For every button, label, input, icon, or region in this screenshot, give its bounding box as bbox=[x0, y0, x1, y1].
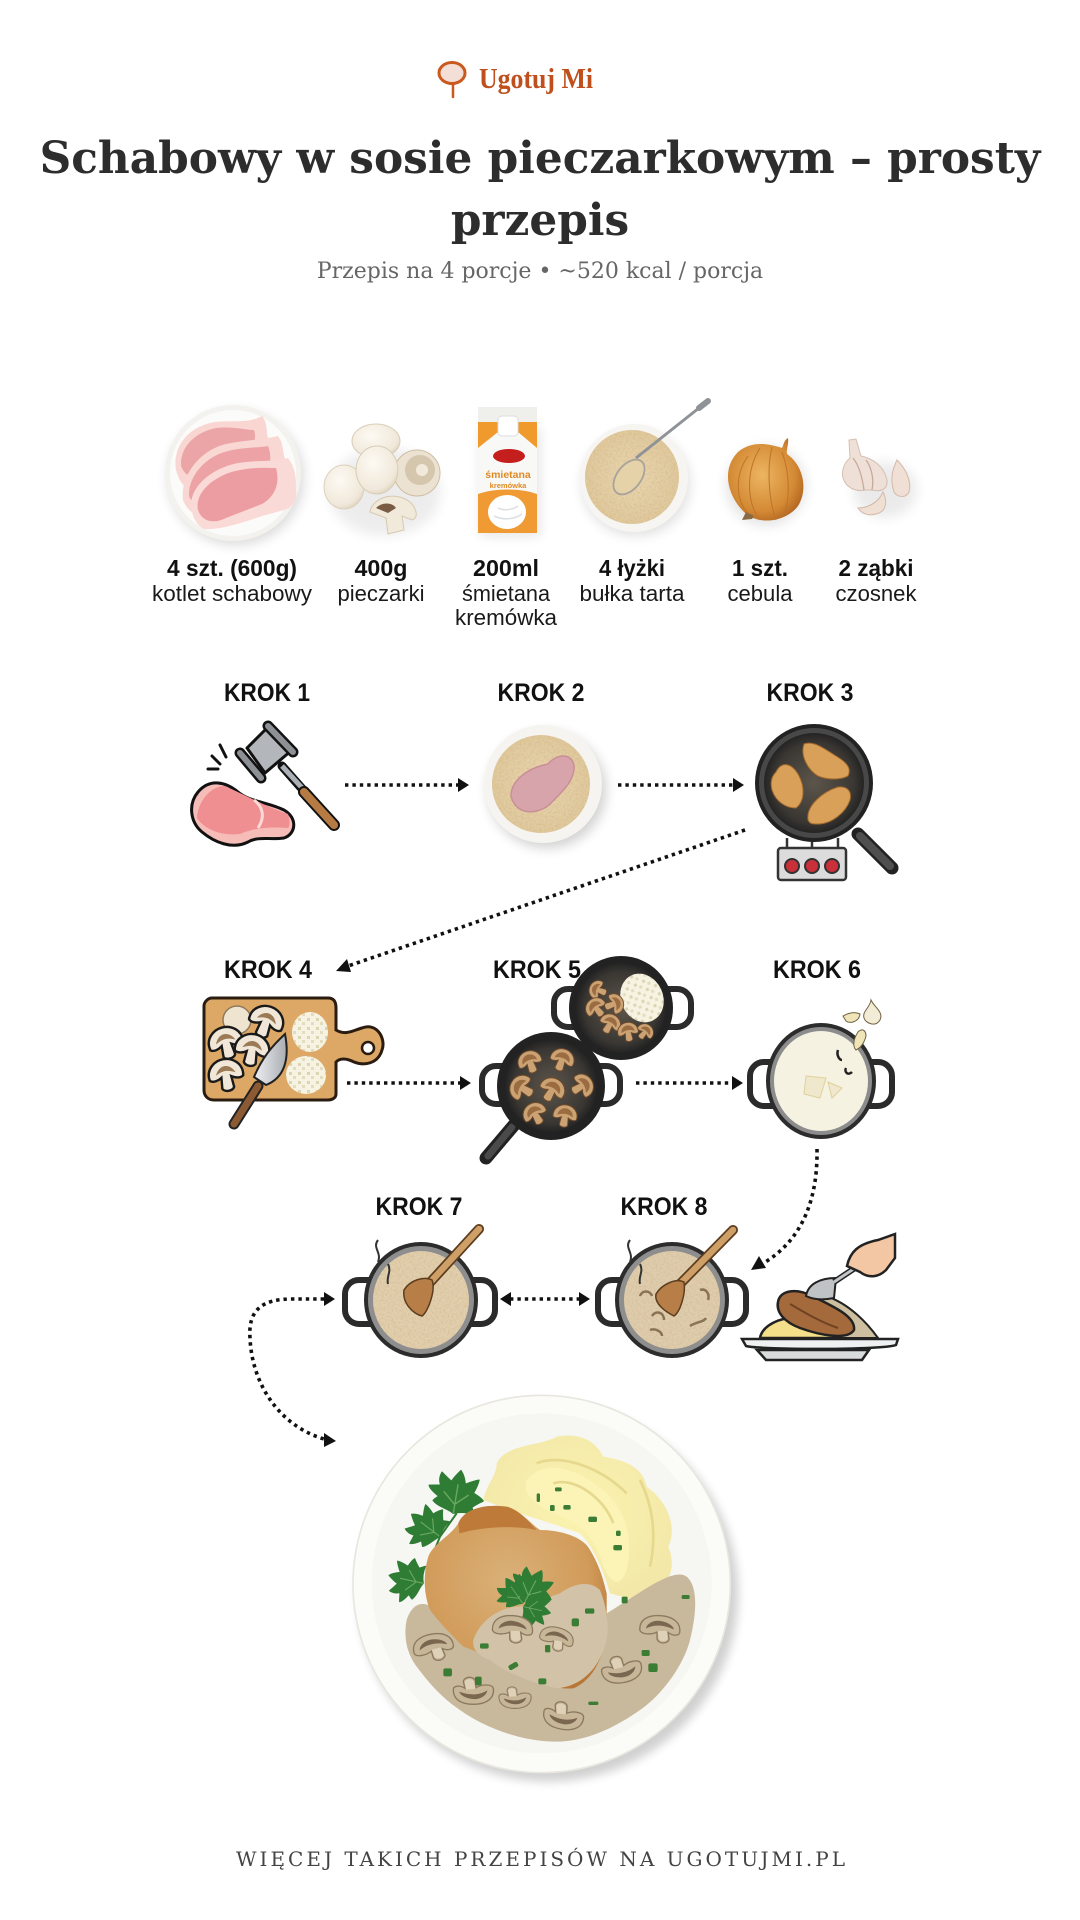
ingredient: garlic bbox=[842, 439, 917, 518]
parsley sprig bbox=[383, 1465, 488, 1606]
icon: step 5 pans bbox=[482, 956, 691, 1158]
footer: WIĘCEJ TAKICH PRZEPISÓW NA UGOTUJMI.PL bbox=[236, 1846, 845, 1871]
icon: step 8 pot with mushrooms and spoon bbox=[598, 1230, 746, 1358]
ingredient: cream carton bbox=[478, 407, 540, 536]
ingredient label: garlic: 2 ząbki bbox=[838, 555, 914, 581]
arrow: step 3 to 4 bbox=[336, 830, 745, 972]
arrow: step 1 to 2 bbox=[345, 778, 469, 792]
final dish plate bbox=[353, 1395, 738, 1782]
mushroom slices bbox=[411, 1614, 681, 1733]
step 5 heading: KROK 5 bbox=[493, 956, 581, 984]
ingredient label: onion: cebula bbox=[728, 581, 793, 606]
logo bbox=[439, 62, 593, 97]
sauce on cutlet bbox=[473, 1584, 608, 1688]
icon: step 4 cutting board bbox=[204, 998, 383, 1124]
ingredient label: pork: 4 szt. (600g) bbox=[167, 555, 297, 581]
ingredient label: breadcrumbs bbox=[580, 555, 685, 606]
arrow: step 7 to 8 double bbox=[500, 1292, 590, 1306]
ingredient label: mushrooms: 400g bbox=[354, 555, 408, 581]
sauce bbox=[405, 1574, 695, 1742]
parsley on cutlet bbox=[490, 1559, 561, 1630]
subtitle: Przepis na 4 porcje • ~520 kcal / porcja bbox=[317, 259, 763, 284]
ingredient: cream carton: kremówka bbox=[490, 481, 527, 490]
arrow: step 5 to 6 bbox=[636, 1076, 743, 1090]
step 2 heading: KROK 2 bbox=[498, 679, 584, 707]
breaded cutlet bbox=[425, 1506, 607, 1689]
icon: serving on plate bbox=[742, 1234, 898, 1360]
icon: logo spoon bbox=[439, 62, 465, 97]
ingredient label: cream: kremówka bbox=[455, 605, 557, 630]
cutlet crust edge bbox=[458, 1506, 537, 1533]
step 8 heading: KROK 8 bbox=[620, 1193, 708, 1221]
step 1 heading: KROK 1 bbox=[224, 679, 310, 707]
ingredient label: cream: śmietana bbox=[462, 581, 550, 606]
ingredient label: onion bbox=[728, 555, 793, 606]
title: Schabowy w sosie pieczarkowym – prosty bbox=[40, 133, 1042, 184]
step 4 heading: KROK 4 bbox=[224, 956, 312, 984]
ingredient label: pork: kotlet schabowy bbox=[152, 581, 313, 606]
arrow: step 4 to 5 bbox=[347, 1076, 471, 1090]
icon: step 7 pot with spoon bbox=[345, 1229, 495, 1358]
arrow: step 6 to serving bbox=[751, 1149, 817, 1270]
ingredients panel bbox=[152, 401, 917, 630]
step 6 heading: KROK 6 bbox=[773, 956, 861, 984]
ingredient: onion bbox=[726, 438, 806, 526]
bottom pan with mushrooms bbox=[482, 1032, 620, 1158]
step 3 heading: KROK 3 bbox=[766, 679, 854, 707]
arrow: step 2 to 3 bbox=[618, 778, 744, 792]
ingredient: pork cutlets bbox=[165, 405, 304, 545]
plate bbox=[353, 1395, 738, 1782]
ingredient label: onion: 1 szt. bbox=[732, 555, 788, 581]
arrow: step 8 to plate curved bbox=[250, 1292, 336, 1447]
ingredient label: mushrooms: pieczarki bbox=[338, 581, 424, 606]
top pan with mushrooms and onion bbox=[554, 956, 691, 1060]
title: przepis bbox=[451, 195, 629, 246]
ingredient label: breadcrumbs: 4 łyżki bbox=[599, 555, 665, 581]
ingredient label: garlic: czosnek bbox=[836, 581, 917, 606]
chopped parsley flecks bbox=[443, 1487, 690, 1705]
ingredient label: pork bbox=[152, 555, 313, 606]
mashed potatoes bbox=[483, 1436, 672, 1603]
ingredient: cream carton: śmietana bbox=[485, 469, 531, 481]
step 7 heading: KROK 7 bbox=[376, 1193, 462, 1221]
icon: step 1 meat and mallet bbox=[192, 726, 334, 845]
ingredient: mushrooms bbox=[324, 424, 441, 536]
ingredient label: cream bbox=[455, 555, 557, 630]
ingredient label: breadcrumbs: bułka tarta bbox=[580, 581, 685, 606]
ingredient label: garlic bbox=[836, 555, 917, 606]
icon: step 3 frying pan on burner bbox=[755, 724, 892, 880]
ingredient label: cream: 200ml bbox=[473, 555, 539, 581]
ingredient label: mushrooms bbox=[338, 555, 424, 606]
logo text: Ugotuj Mi bbox=[479, 64, 593, 95]
icon: step 2 breaded plate bbox=[484, 725, 606, 848]
icon: step 6 cream pot bbox=[750, 1000, 892, 1139]
ingredient: breadcrumbs bowl bbox=[580, 401, 708, 536]
